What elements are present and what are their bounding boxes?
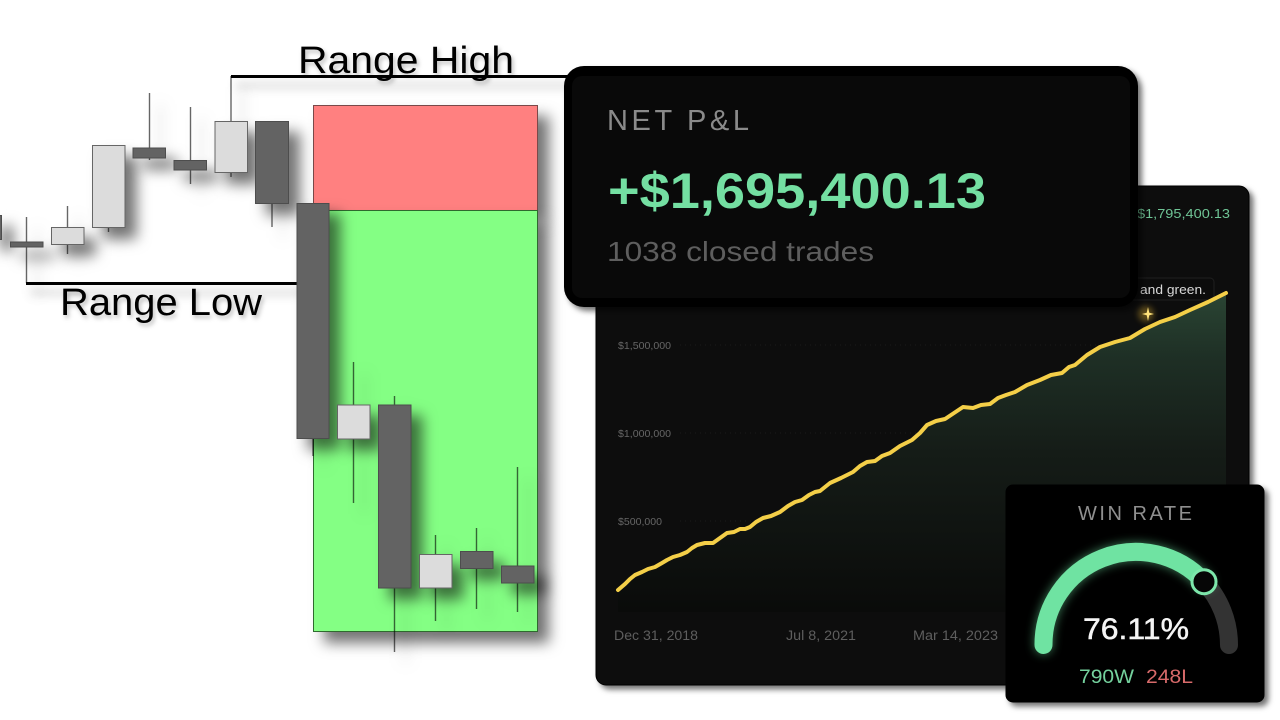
candle 12 (460, 528, 493, 609)
y axis labels (618, 340, 671, 528)
panel: red stop-loss zone (314, 106, 538, 210)
candle 11 (420, 535, 452, 621)
candle 0 (0, 216, 2, 240)
candle 6 (215, 76, 248, 177)
label: Range High: Range High (298, 40, 514, 82)
x axis labels: Jul 8, 2021 (786, 628, 856, 643)
candle 7 (256, 122, 288, 227)
panel: win rate (1006, 485, 1264, 702)
candlestick chart (0, 76, 534, 652)
candle 2 (52, 206, 84, 254)
x axis labels (614, 628, 998, 643)
candle 5 (174, 107, 206, 184)
candle 13 (502, 467, 534, 612)
equity line (618, 293, 1226, 590)
ending equity value: $1,795,400.13 (1137, 206, 1230, 221)
equity area fill (618, 293, 1226, 612)
wins count: 790W (1079, 666, 1135, 688)
panel: green take-profit zone (314, 210, 538, 632)
candle 9 (338, 362, 370, 503)
candle 1 (10, 217, 43, 283)
panel: equity curve (596, 186, 1249, 685)
tooltip: and green. (1140, 282, 1206, 297)
x axis labels: Dec 31, 2018 (614, 628, 698, 643)
closed trades count: 1038 closed trades (607, 236, 874, 267)
range low line (26, 282, 300, 285)
net P&L value: +$1,695,400.13 (608, 163, 986, 219)
panel: net P&L (564, 66, 1138, 307)
tooltip (1120, 278, 1214, 300)
candle 8 (297, 204, 329, 456)
candle 4 (133, 93, 166, 160)
losses count: 248L (1146, 666, 1193, 688)
y axis labels: $1,500,000 (618, 340, 671, 352)
range high line (231, 75, 570, 78)
win rate heading: WIN RATE (1078, 503, 1192, 525)
net P&L heading: NET P&L (607, 105, 749, 137)
candle 3 (92, 146, 125, 232)
y axis labels: $500,000 (618, 516, 662, 528)
y axis labels: $1,000,000 (618, 428, 671, 440)
x axis labels: Mar 14, 2023 (913, 628, 998, 643)
win rate value: 76.11% (1083, 613, 1189, 646)
gauge (1043, 552, 1229, 645)
candle 10 (378, 396, 411, 652)
label: Range Low: Range Low (60, 282, 263, 324)
sparkle icon (1138, 306, 1154, 322)
